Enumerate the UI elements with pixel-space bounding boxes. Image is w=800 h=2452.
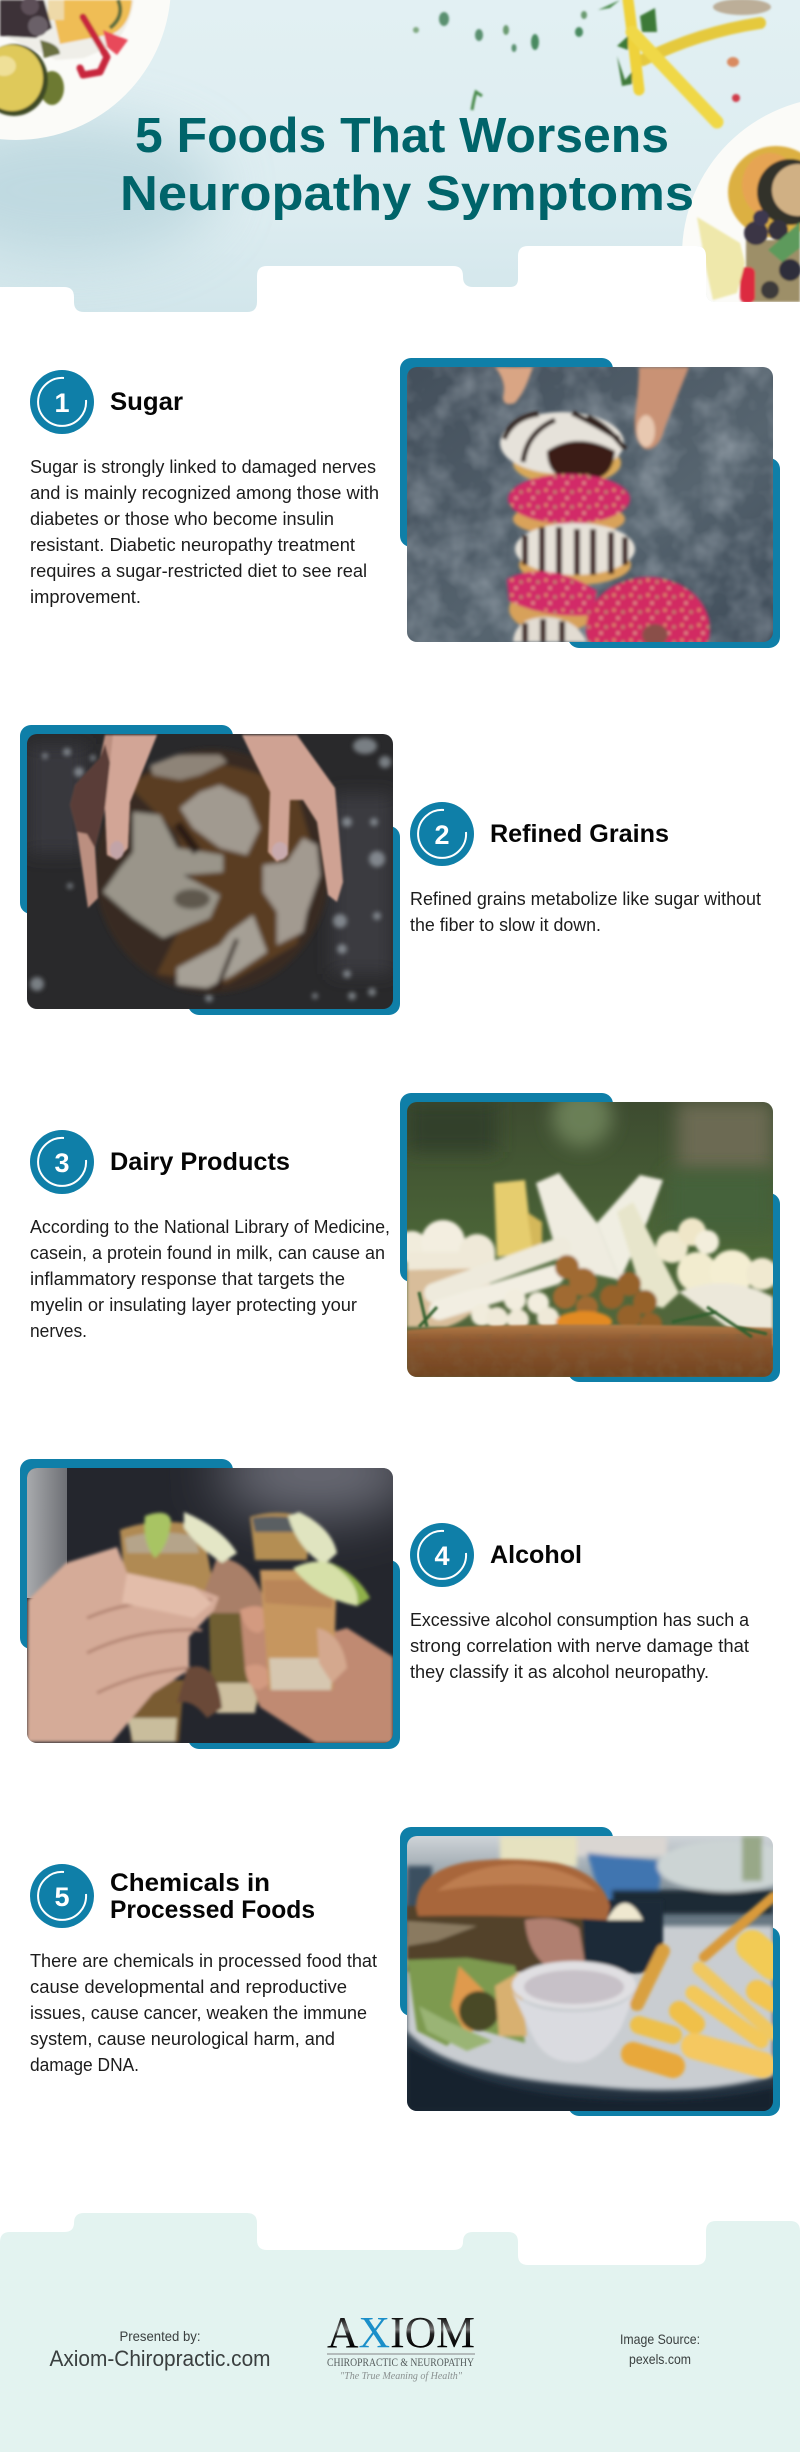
icon: number 5: 5 — [54, 1882, 70, 1912]
photo frame: burger — [400, 1827, 797, 2116]
heading: chemicals in processed foods: Processed Foods — [110, 1896, 315, 1924]
text block: sugar: and is mainly recognized among those with — [30, 483, 379, 503]
text block: chemicals — [30, 1951, 377, 2075]
panel: 3 dairy products — [30, 1087, 780, 1382]
logo: axiom — [327, 2308, 475, 2382]
text block: sugar — [30, 457, 379, 607]
text block: dairy products: inflammatory response that targets the — [30, 1269, 345, 1289]
text block: image source: pexels.com — [629, 2351, 691, 2367]
text block: alcohol: they classify it as alcohol neuropathy. — [410, 1662, 709, 1682]
text block: image source: Image Source: — [620, 2331, 700, 2347]
footer panel — [0, 2213, 800, 2452]
text block: dairy products: According to the National Library of Medicine, — [30, 1217, 390, 1237]
text block: sugar: Sugar is strongly linked to damaged nerves — [30, 457, 376, 477]
text block: dairy products: nerves. — [30, 1321, 87, 1341]
photo: bread loaf in hands — [27, 734, 393, 1009]
text block: refined grains: Refined grains metabolize like sugar without — [410, 889, 761, 909]
icon: number 4 — [410, 1523, 474, 1587]
icon: number 2 — [410, 802, 474, 866]
text block: presented by: Presented by: — [120, 2328, 200, 2344]
panel: 4 alcohol — [20, 1428, 750, 1749]
text block: dairy products — [30, 1217, 390, 1341]
heading: dairy products: Dairy Products — [110, 1148, 290, 1176]
photo frame: donuts — [400, 358, 780, 648]
text block: chemicals: cause developmental and reproductive — [30, 1977, 347, 1997]
title — [120, 109, 694, 221]
text block: alcohol: strong correlation with nerve damage that — [410, 1636, 749, 1656]
icon: right plate — [682, 102, 800, 302]
icon: number 3 — [30, 1130, 94, 1194]
photo: cheese board — [396, 1087, 778, 1377]
text block: chemicals: damage DNA. — [30, 2055, 139, 2075]
panel: 5 chemicals in processed foods — [30, 1827, 797, 2116]
icon: number 1: 1 — [54, 388, 70, 418]
icon: yellow pepper strips and herbs — [413, 0, 771, 122]
text block: sugar: improvement. — [30, 587, 141, 607]
icon: number 2: 2 — [434, 820, 450, 850]
heading: chemicals in processed foods: Chemicals in — [110, 1869, 270, 1897]
title: Neuropathy Symptoms — [120, 167, 694, 221]
photo frame: cheese — [396, 1087, 780, 1382]
logo: axiom: AXIOM — [327, 2308, 475, 2357]
logo: axiom: "The True Meaning of Health" — [340, 2371, 463, 2382]
photo: burger and fries — [407, 1836, 797, 2111]
text block: refined grains — [410, 889, 761, 935]
text block: chemicals: There are chemicals in processed food that — [30, 1951, 377, 1971]
heading: alcohol: Alcohol — [490, 1541, 582, 1569]
text block: presented by: Axiom-Chiropractic.com — [50, 2346, 270, 2371]
heading: sugar: Sugar — [110, 388, 183, 416]
photo frame: bread — [20, 725, 400, 1015]
heading: chemicals in processed foods — [110, 1869, 315, 1924]
text block: alcohol — [410, 1610, 750, 1682]
header banner with food photo — [0, 0, 800, 312]
text block: sugar: requires a sugar-restricted diet to see real — [30, 561, 367, 581]
icon: number 5 — [30, 1864, 94, 1928]
text block: dairy products: casein, a protein found in milk, can cause an — [30, 1243, 385, 1263]
text block: alcohol: Excessive alcohol consumption has such a — [410, 1610, 750, 1630]
icon: number 4: 4 — [434, 1541, 450, 1571]
photo frame: drinks — [20, 1459, 400, 1749]
text block: presented by — [50, 2328, 270, 2371]
text block: chemicals: issues, cause cancer, weaken the immune — [30, 2003, 367, 2023]
heading: refined grains: Refined Grains — [490, 820, 669, 848]
text block: dairy products: myelin or insulating layer protecting your — [30, 1295, 357, 1315]
logo: axiom: CHIROPRACTIC & NEUROPATHY — [327, 2357, 475, 2369]
icon: number 1 — [30, 370, 94, 434]
panel: 2 refined grains — [20, 725, 761, 1015]
text block: refined grains: the fiber to slow it down. — [410, 915, 601, 935]
photo: stacked donuts — [407, 367, 773, 642]
text block: chemicals: system, cause neurological harm, and — [30, 2029, 335, 2049]
text block: sugar: resistant. Diabetic neuropathy treatment — [30, 535, 355, 555]
text block: image source — [620, 2331, 700, 2367]
panel: 1 sugar — [30, 358, 780, 648]
icon: number 3: 3 — [54, 1148, 70, 1178]
icon: left plate — [0, 0, 171, 140]
photo: toasting shot glasses — [27, 1468, 393, 1743]
text block: sugar: diabetes or those who become insulin — [30, 509, 334, 529]
title: 5 Foods That Worsens — [135, 109, 669, 163]
